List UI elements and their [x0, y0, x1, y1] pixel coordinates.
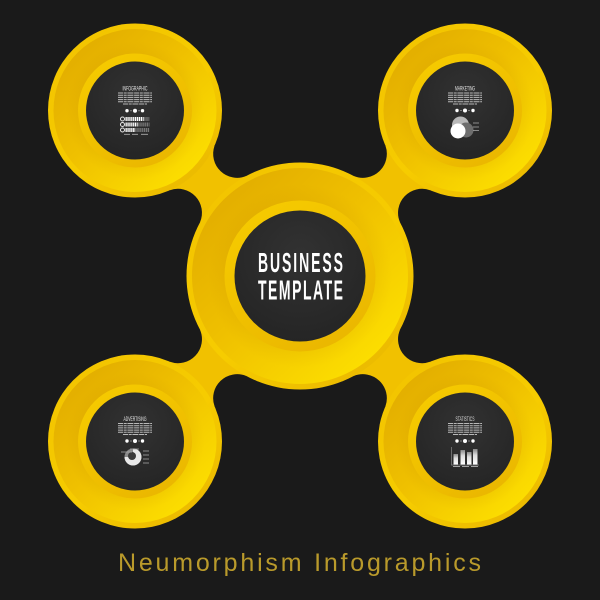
title: footer: Neumorphism Infographics [118, 549, 481, 577]
text block: marketing body [448, 93, 482, 104]
icon: pagination dots [125, 109, 144, 113]
text block: infographic body [118, 93, 152, 104]
chart: bar chart [452, 447, 479, 466]
heading: business template: TEMPLATE [258, 274, 343, 306]
panel: central circle [186, 162, 414, 390]
icon: pagination dots [455, 108, 475, 112]
icon: pagination dots [125, 439, 144, 443]
text block: advertising body [118, 424, 152, 434]
panel: advertising circle [48, 354, 222, 528]
panel: infographic circle [48, 24, 222, 198]
panel: marketing circle [378, 24, 552, 198]
chart: venn diagram [450, 116, 479, 138]
text block: statistics body [448, 424, 482, 434]
heading: infographic: INFOGRAPHIC [122, 86, 148, 92]
heading: business template: BUSINESS [258, 247, 343, 278]
connectors between the central circle and corner circles [170, 146, 430, 406]
heading: statistics: STATISTICS [456, 417, 474, 423]
icon: pagination dots [455, 439, 475, 443]
heading: marketing: MARKETING [455, 86, 475, 92]
chart: icon rows [120, 117, 150, 134]
heading: business template [258, 247, 343, 306]
chart: donut [121, 448, 149, 466]
panel: statistics circle [378, 354, 552, 528]
heading: advertising: ADVERTISING [124, 417, 147, 423]
